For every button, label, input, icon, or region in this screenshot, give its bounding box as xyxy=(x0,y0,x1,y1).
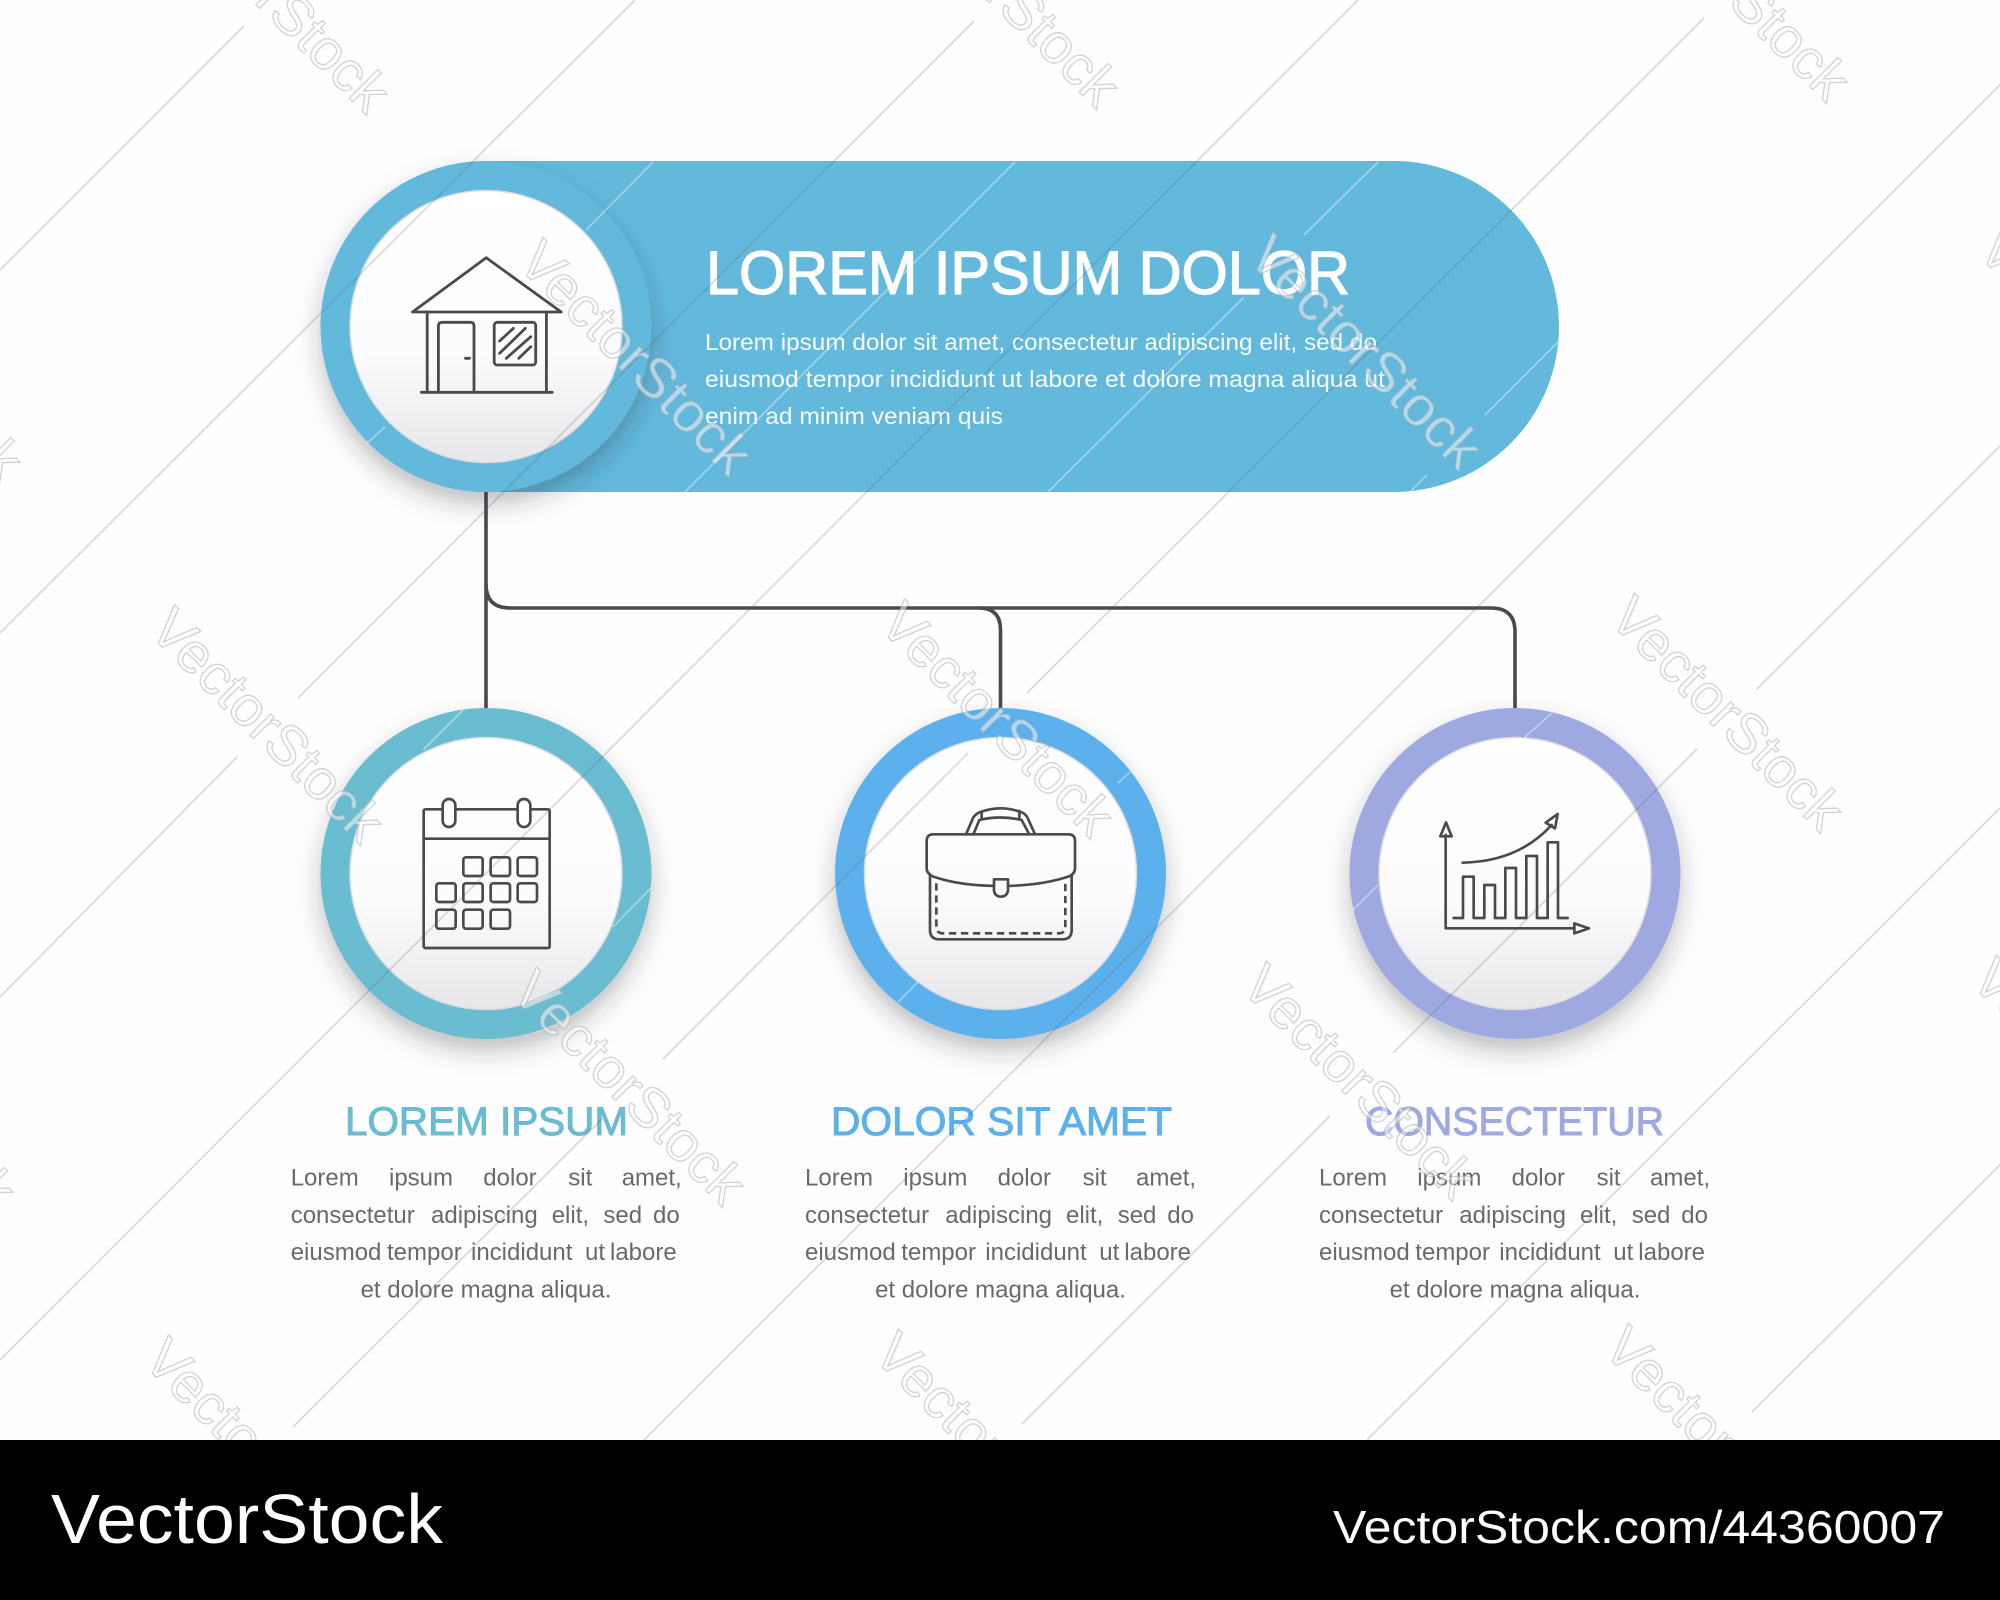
text block: lorem ipsum description: ipsum xyxy=(389,1164,453,1192)
panel: dolor sit amet xyxy=(805,708,1196,1304)
watermark overlay: VectorStock xyxy=(869,590,1127,849)
text block: lorem ipsum description: labore xyxy=(610,1239,677,1266)
watermark overlay: VectorStock xyxy=(501,958,759,1217)
text block: dolor sit amet description: elit, xyxy=(1066,1202,1103,1229)
text block: lorem ipsum description: Lorem xyxy=(291,1164,359,1192)
text block: dolor sit amet description: Lorem xyxy=(805,1164,873,1192)
icon badge: house xyxy=(320,161,652,492)
text block: header description: Lorem ipsum dolor sit amet, consectetur adipiscing elit, sed do xyxy=(705,329,1377,355)
watermark overlay: VectorStock xyxy=(139,596,397,855)
panel: consectetur xyxy=(1319,708,1710,1304)
text block: header description: enim ad minim veniam quis xyxy=(705,403,1003,429)
text block: consectetur description xyxy=(1319,1164,1710,1304)
text block: lorem ipsum description: ut xyxy=(585,1239,605,1266)
watermark overlay: VectorStock xyxy=(507,228,766,487)
ring: teal xyxy=(320,708,652,1039)
icon: calendar xyxy=(424,799,550,948)
text block: consectetur description: adipiscing xyxy=(1459,1202,1566,1229)
text block: header description: eiusmod tempor incididunt ut labore et dolore magna aliqua ut xyxy=(705,366,1385,392)
text block: lorem ipsum description: dolor xyxy=(483,1164,537,1192)
text block: consectetur description: eiusmod xyxy=(1319,1239,1410,1266)
panel: lorem ipsum xyxy=(291,708,682,1304)
footer image id: VectorStock.com/44360007 xyxy=(1333,1501,1945,1553)
ring: blue xyxy=(835,708,1166,1039)
text block: header description xyxy=(705,329,1385,429)
watermark overlay: VectorStock xyxy=(1237,222,1496,481)
text block: dolor sit amet description: amet, xyxy=(1136,1164,1196,1192)
text block: dolor sit amet description: sit xyxy=(1083,1164,1107,1192)
watermark overlay: VectorStock xyxy=(863,1320,1121,1579)
text block: dolor sit amet description xyxy=(805,1164,1196,1304)
text block: consectetur description: tempor xyxy=(1415,1239,1490,1266)
text block: lorem ipsum description: eiusmod xyxy=(291,1239,381,1266)
text block: consectetur description: et dolore magna aliqua. xyxy=(1390,1276,1640,1304)
heading: consectetur: CONSECTETUR xyxy=(1365,1100,1664,1144)
text block: dolor sit amet description: ipsum xyxy=(903,1164,967,1192)
text block: dolor sit amet description: do xyxy=(1167,1202,1194,1229)
icon: growth chart xyxy=(1440,814,1589,933)
watermark overlay: VectorStock xyxy=(1599,584,1857,843)
text block: dolor sit amet description: incididunt xyxy=(985,1239,1087,1266)
icon: house xyxy=(412,258,561,392)
text block: consectetur description: Lorem xyxy=(1319,1164,1387,1192)
watermark overlay: VectorStock xyxy=(1231,952,1489,1211)
text block: dolor sit amet description: tempor xyxy=(901,1239,976,1266)
text block: lorem ipsum description: incididunt xyxy=(471,1239,573,1266)
heading: dolor sit amet: DOLOR SIT AMET xyxy=(831,1100,1172,1144)
text block: dolor sit amet description: sed xyxy=(1118,1202,1156,1229)
text block: lorem ipsum description: amet, xyxy=(622,1164,682,1192)
text block: lorem ipsum description: tempor xyxy=(387,1239,462,1266)
text block: dolor sit amet description: eiusmod xyxy=(805,1239,896,1266)
text block: consectetur description: do xyxy=(1681,1202,1708,1229)
text block: dolor sit amet description: ut xyxy=(1099,1239,1120,1266)
icon: briefcase xyxy=(927,808,1075,939)
text block: lorem ipsum description xyxy=(291,1164,682,1304)
heading: lorem ipsum: LOREM IPSUM xyxy=(345,1100,628,1144)
connector lines xyxy=(486,490,1515,708)
text block: lorem ipsum description: sit xyxy=(568,1164,593,1192)
footer brand: VectorStock xyxy=(51,1480,444,1558)
text block: dolor sit amet description: labore xyxy=(1124,1239,1191,1266)
text block: consectetur description: amet, xyxy=(1650,1164,1710,1192)
text block: lorem ipsum description: do xyxy=(653,1202,680,1229)
text block: dolor sit amet description: consectetur xyxy=(805,1202,929,1229)
text block: consectetur description: sit xyxy=(1597,1164,1621,1192)
text block: dolor sit amet description: dolor xyxy=(998,1164,1051,1192)
text block: consectetur description: consectetur xyxy=(1319,1202,1443,1229)
text block: consectetur description: elit, xyxy=(1580,1202,1617,1229)
footer bar xyxy=(0,1440,2000,1600)
ring: lavender xyxy=(1350,708,1680,1039)
text block: consectetur description: ipsum xyxy=(1417,1164,1481,1192)
watermark overlay: VectorStock xyxy=(1593,1314,1851,1573)
panel: header pill xyxy=(321,161,1559,492)
watermark overlay: VectorStock xyxy=(133,1326,391,1585)
text block: lorem ipsum description: adipiscing xyxy=(431,1202,538,1229)
text block: consectetur description: sed xyxy=(1632,1202,1670,1229)
text block: dolor sit amet description: et dolore magna aliqua. xyxy=(875,1276,1126,1304)
text block: consectetur description: labore xyxy=(1638,1239,1705,1266)
pill background xyxy=(321,161,1559,492)
text block: lorem ipsum description: elit, xyxy=(552,1202,589,1229)
text block: consectetur description: dolor xyxy=(1512,1164,1565,1192)
text block: dolor sit amet description: adipiscing xyxy=(945,1202,1052,1229)
text block: lorem ipsum description: et dolore magna aliqua. xyxy=(361,1276,611,1304)
text block: lorem ipsum description: sed xyxy=(603,1202,642,1229)
heading: main title: LOREM IPSUM DOLOR xyxy=(706,239,1350,307)
text block: consectetur description: ut xyxy=(1613,1239,1634,1266)
text block: consectetur description: incididunt xyxy=(1499,1239,1601,1266)
text block: lorem ipsum description: consectetur xyxy=(291,1202,415,1229)
